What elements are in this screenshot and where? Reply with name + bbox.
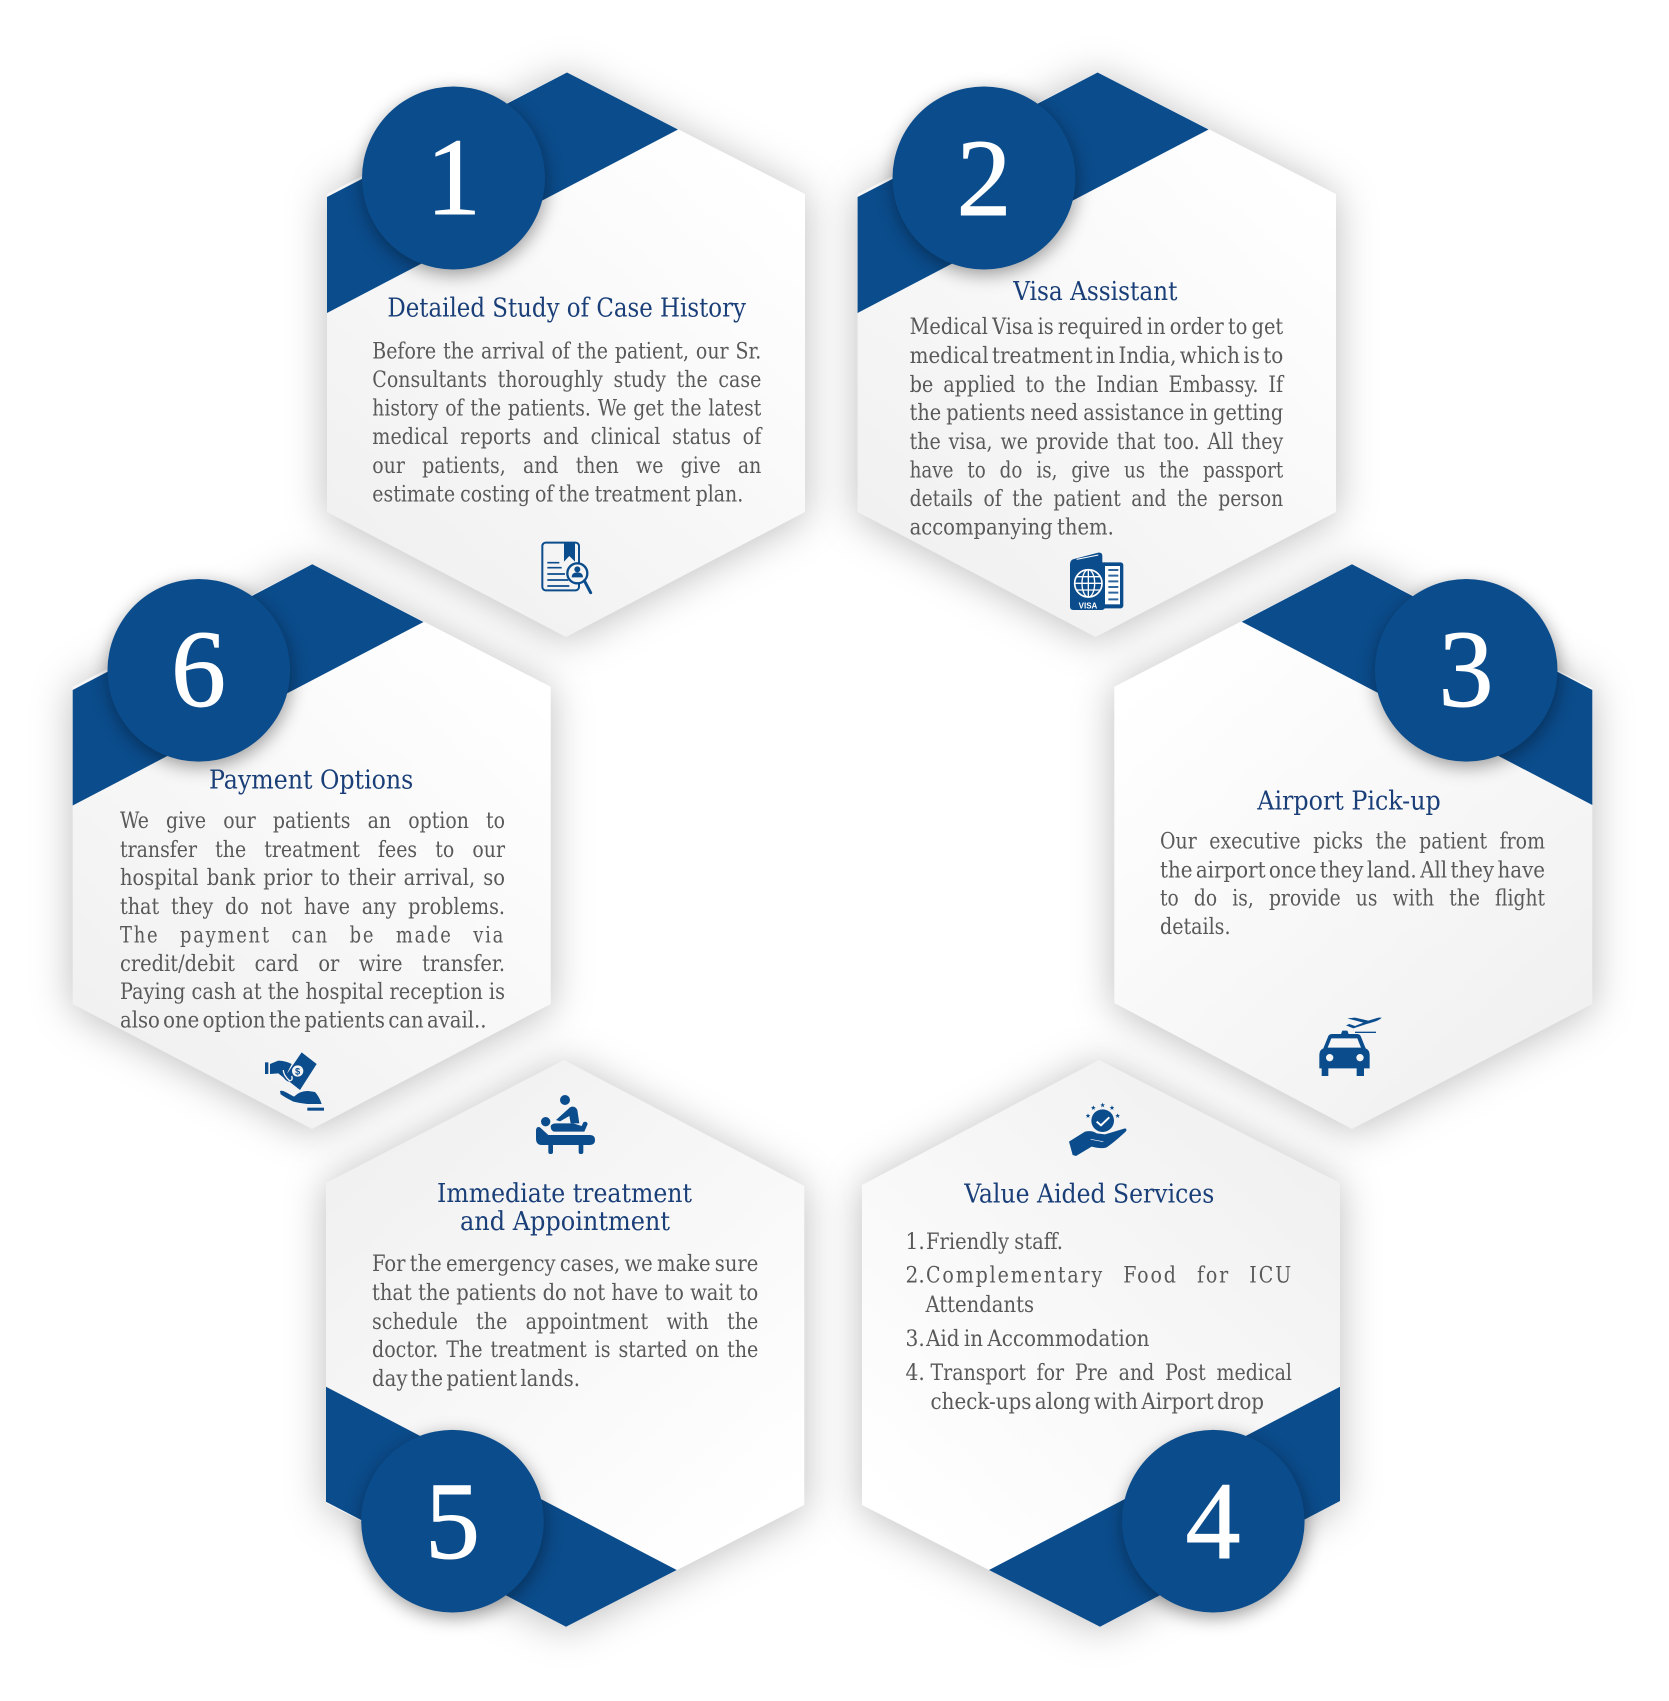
heading: Visa Assistant xyxy=(1012,277,1178,307)
body text xyxy=(910,314,1285,540)
body text: be applied to the Indian Embassy. If xyxy=(910,372,1285,398)
numbered list xyxy=(906,1229,1293,1415)
heading: and Appointment xyxy=(460,1207,671,1237)
panel: step 4 value aided services xyxy=(862,1060,1340,1627)
hexagon background xyxy=(326,1060,804,1627)
hexagon background xyxy=(862,1060,1340,1627)
numbered list: Transport for Pre and Post medical xyxy=(930,1360,1292,1386)
body text: the airport once they land. All they have xyxy=(1160,857,1545,883)
icon: visa passport: VISA xyxy=(1079,602,1098,611)
body text: accompanying them. xyxy=(910,514,1114,540)
body text: schedule the appointment with the xyxy=(372,1309,758,1335)
body text xyxy=(1160,828,1545,940)
accent band xyxy=(858,72,1209,313)
accent band xyxy=(989,1387,1340,1627)
body text: details of the patient and the person xyxy=(910,486,1283,512)
hexagon background xyxy=(73,564,551,1129)
number badge 2 xyxy=(892,86,1076,270)
body text: to do is, provide us with the flight xyxy=(1160,886,1545,912)
body text: doctor. The treatment is started on the xyxy=(372,1337,758,1363)
numbered list: Aid in Accommodation xyxy=(925,1326,1150,1352)
heading: Value Aided Services xyxy=(963,1180,1214,1210)
panel: step 6 payment options xyxy=(73,564,551,1129)
heading: Airport Pick-up xyxy=(1256,786,1441,816)
panel: step 2 visa assistant xyxy=(858,72,1336,637)
body text: The payment can be made via xyxy=(120,922,505,948)
heading: Payment Options xyxy=(209,765,413,795)
icon: taxi and plane xyxy=(1319,1018,1382,1076)
accent band xyxy=(73,564,423,806)
numbered list: 2. xyxy=(906,1263,925,1289)
numbered list: 3. xyxy=(906,1326,925,1352)
accent band xyxy=(1242,564,1592,805)
number badge 1: 1 xyxy=(426,116,481,238)
number badge 5 xyxy=(361,1430,544,1612)
body text: hospital bank prior to their arrival, so xyxy=(120,865,505,891)
accent band xyxy=(327,72,678,313)
body text: For the emergency cases, we make sure xyxy=(372,1251,758,1277)
body text: Consultants thoroughly study the case xyxy=(372,367,761,393)
body text xyxy=(372,1251,758,1392)
body text: details. xyxy=(1160,914,1230,940)
hexagon background xyxy=(858,72,1336,637)
number badge 6 xyxy=(108,579,290,762)
panel: step 5 immediate treatment and appointment xyxy=(326,1060,804,1627)
body text xyxy=(372,338,763,507)
panel: step 1 detailed study of case history xyxy=(327,72,805,637)
body text: Medical Visa is required in order to get xyxy=(910,314,1283,340)
icon: hands exchanging money: $ xyxy=(295,1066,301,1076)
body text xyxy=(120,808,505,1034)
icon: hands exchanging money xyxy=(265,1052,324,1111)
icon: hand with check badge xyxy=(1069,1103,1127,1156)
body text: Paying cash at the hospital reception is xyxy=(120,979,505,1005)
body text: the patients need assistance in getting xyxy=(910,400,1283,426)
numbered list: check-ups along with Airport drop xyxy=(930,1389,1264,1415)
numbered list: Friendly staff. xyxy=(926,1229,1063,1255)
body text: have to do is, give us the passport xyxy=(910,458,1283,484)
number badge 5: 5 xyxy=(425,1460,480,1582)
icon: document with magnifier xyxy=(542,543,591,593)
body text: our patients, and then we give an xyxy=(372,453,761,479)
number badge 6: 6 xyxy=(171,608,226,730)
body text: credit/debit card or wire transfer. xyxy=(120,951,505,977)
numbered list: 1. xyxy=(906,1229,925,1255)
body text: day the patient lands. xyxy=(372,1366,580,1392)
number badge 1 xyxy=(362,86,545,270)
heading: Detailed Study of Case History xyxy=(387,294,747,324)
heading xyxy=(437,1179,693,1237)
number badge 2: 2 xyxy=(956,117,1012,239)
panel: step 3 airport pick-up xyxy=(1114,564,1592,1129)
accent band xyxy=(326,1387,677,1627)
number badge 4: 4 xyxy=(1186,1460,1240,1582)
number badge 3 xyxy=(1375,579,1557,762)
body text: also one option the patients can avail.. xyxy=(120,1008,486,1034)
numbered list: Attendants xyxy=(925,1292,1034,1318)
body text: medical treatment in India, which is to xyxy=(910,343,1283,369)
icon: patient massage bed xyxy=(536,1095,595,1154)
body text: Our executive picks the patient from xyxy=(1160,828,1545,854)
body text: that they do not have any problems. xyxy=(120,894,505,920)
heading: Immediate treatment xyxy=(437,1179,693,1209)
body text: estimate costing of the treatment plan. xyxy=(372,481,743,507)
number badge 3: 3 xyxy=(1438,608,1494,730)
body text: We give our patients an option to xyxy=(120,808,505,834)
body text: the visa, we provide that too. All they xyxy=(910,429,1284,455)
body text: history of the patients. We get the latest xyxy=(372,396,761,422)
numbered list: 4. xyxy=(906,1360,925,1386)
body text: medical reports and clinical status of xyxy=(372,424,763,450)
hexagon background xyxy=(1114,564,1592,1129)
numbered list: Complementary Food for ICU xyxy=(926,1263,1293,1289)
icon: visa passport xyxy=(1070,553,1123,611)
body text: transfer the treatment fees to our xyxy=(120,837,505,863)
hexagon background xyxy=(327,72,805,637)
number badge 4 xyxy=(1122,1430,1305,1612)
body text: that the patients do not have to wait to xyxy=(372,1280,758,1306)
body text: Before the arrival of the patient, our Sr. xyxy=(372,338,761,364)
